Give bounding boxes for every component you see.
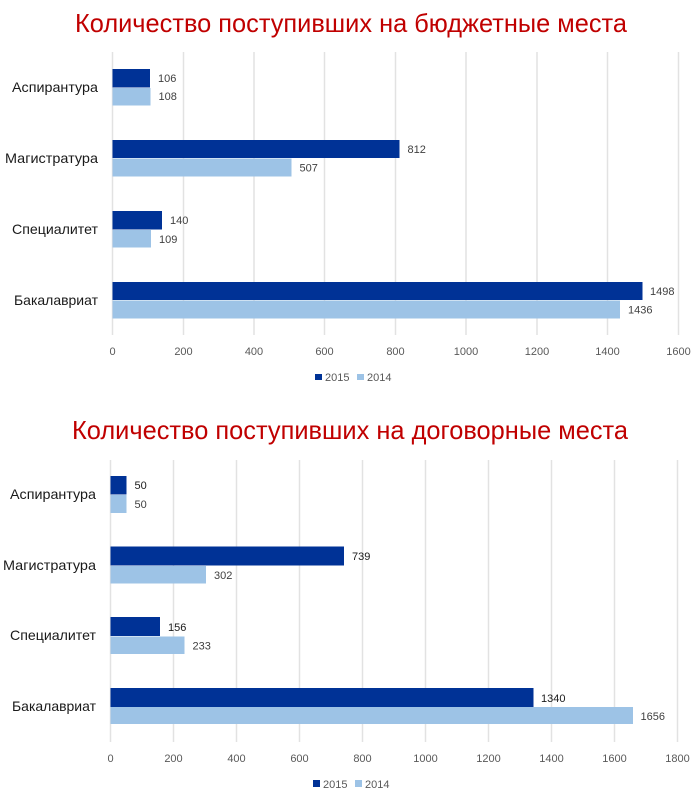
legend: 2015 xyxy=(325,372,349,384)
chart: contract places xyxy=(3,460,690,791)
x axis labels: 1400 xyxy=(595,346,620,358)
category: Специалитет: 233 xyxy=(192,640,211,652)
category: Бакалавриат: 1656 xyxy=(640,711,665,723)
x axis labels: 1000 xyxy=(413,753,438,765)
category: Магистратура: 812 xyxy=(408,144,426,156)
x axis labels: 400 xyxy=(227,753,246,765)
legend xyxy=(313,779,389,791)
x axis labels: 200 xyxy=(174,346,193,358)
category: Аспирантура xyxy=(12,69,177,106)
category: Бакалавриат xyxy=(12,688,665,724)
x axis labels xyxy=(109,346,691,358)
category: Бакалавриат: 1340 xyxy=(541,693,565,705)
x axis labels: 1600 xyxy=(602,753,627,765)
x axis labels: 1800 xyxy=(665,753,690,765)
category: Аспирантура: 106 xyxy=(158,73,176,85)
category: Аспирантура: Аспирантура xyxy=(10,486,96,502)
category: Магистратура: Магистратура xyxy=(5,150,98,166)
category: Бакалавриат: 1498 xyxy=(650,286,674,298)
x axis labels: 1400 xyxy=(539,753,564,765)
title: contract places: Количество поступивших на договорные места xyxy=(72,415,629,445)
x axis labels: 1000 xyxy=(454,346,478,358)
category: Специалитет: 140 xyxy=(170,215,188,227)
category: Специалитет xyxy=(12,211,188,248)
category: Аспирантура: 50 xyxy=(134,480,147,492)
category: Специалитет: 109 xyxy=(159,234,177,246)
x axis labels: 600 xyxy=(315,346,334,358)
chart: budget places xyxy=(5,52,691,384)
category: Магистратура: 507 xyxy=(300,162,318,174)
category: Аспирантура: 108 xyxy=(158,91,177,103)
x axis labels: 800 xyxy=(353,753,372,765)
legend xyxy=(315,372,391,384)
category: Специалитет: 156 xyxy=(168,622,186,634)
title: budget places: Количество поступивших на бюджетные места xyxy=(75,8,628,38)
category: Аспирантура xyxy=(10,476,147,513)
category: Аспирантура: 50 xyxy=(134,499,147,511)
category: Бакалавриат: Бакалавриат xyxy=(12,698,97,714)
x axis labels: 600 xyxy=(290,753,309,765)
category: Магистратура xyxy=(3,546,370,584)
legend: 2014 xyxy=(365,779,389,791)
category: Аспирантура: Аспирантура xyxy=(12,79,98,95)
category: Специалитет: Специалитет xyxy=(12,221,99,237)
legend: 2014 xyxy=(367,372,391,384)
x axis labels: 200 xyxy=(164,753,183,765)
x axis labels: 800 xyxy=(386,346,405,358)
legend: 2015 xyxy=(323,779,347,791)
x axis labels xyxy=(107,753,690,765)
x axis labels: 0 xyxy=(107,753,114,765)
x axis labels: 1600 xyxy=(666,346,691,358)
category: Бакалавриат xyxy=(14,282,674,318)
x axis labels: 1200 xyxy=(476,753,501,765)
category: Магистратура: 739 xyxy=(352,551,370,563)
category: Специалитет xyxy=(10,617,211,654)
x axis labels: 1200 xyxy=(525,346,549,358)
category: Специалитет: Специалитет xyxy=(10,627,97,643)
category: Бакалавриат: Бакалавриат xyxy=(14,292,99,308)
category: Бакалавриат: 1436 xyxy=(628,304,652,316)
x axis labels: 0 xyxy=(109,346,116,358)
x axis labels: 400 xyxy=(245,346,263,358)
category: Магистратура: Магистратура xyxy=(3,557,96,573)
category: Магистратура xyxy=(5,140,426,176)
category: Магистратура: 302 xyxy=(214,570,232,582)
